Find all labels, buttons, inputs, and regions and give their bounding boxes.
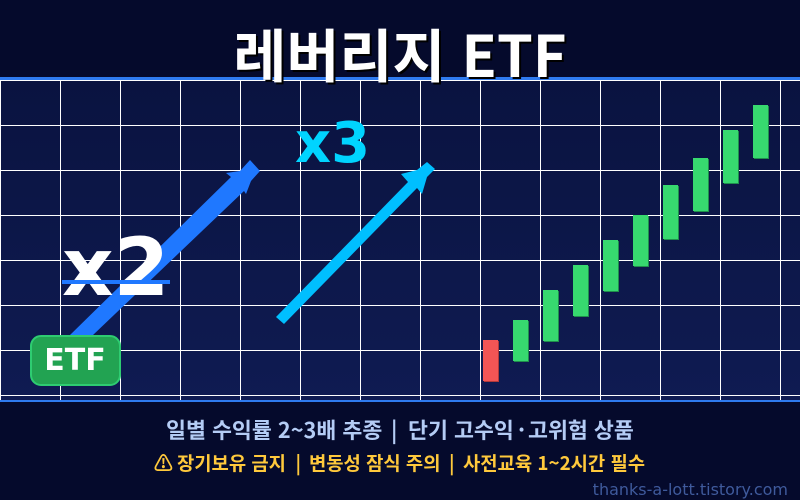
footer line 2: | bbox=[449, 449, 455, 476]
footer line 1: · bbox=[518, 414, 525, 445]
footer line 2 bbox=[154, 449, 645, 476]
candlestick chart bbox=[483, 105, 769, 382]
footer line 2: ⚠ bbox=[154, 449, 173, 476]
footer band bbox=[0, 400, 800, 500]
label: x3: x3 bbox=[295, 111, 370, 176]
candle: green 1 bbox=[513, 320, 529, 362]
candle: green 2 bbox=[543, 290, 559, 342]
candle: red bbox=[483, 340, 499, 382]
title: 레버리지 ETF bbox=[235, 12, 569, 96]
footer line 1: 단기 고수익 bbox=[408, 414, 514, 445]
candle: green 4 bbox=[603, 240, 619, 292]
candle: green 8 bbox=[723, 130, 739, 184]
badge: ETF: ETF bbox=[44, 343, 106, 378]
candle: green 9 bbox=[753, 105, 769, 159]
footer line 1: | bbox=[391, 414, 397, 445]
footer line 1: 일별 수익률 2~3배 추종 bbox=[166, 414, 382, 445]
title: 레버리지 ETF bbox=[233, 10, 567, 94]
candle: green 3 bbox=[573, 265, 589, 317]
header band bbox=[0, 0, 800, 77]
arrow: x2 blue bbox=[70, 160, 260, 335]
badge: ETF bbox=[31, 336, 120, 385]
candle: green 5 bbox=[633, 215, 649, 267]
chart background bbox=[0, 80, 800, 400]
footer line 1 bbox=[166, 414, 634, 445]
footer line 1: 고위험 상품 bbox=[528, 414, 634, 445]
candle: green 7 bbox=[693, 158, 709, 212]
footer line 2: 장기보유 금지 bbox=[177, 449, 286, 476]
watermark: thanks-a-lott.tistory.com bbox=[593, 480, 788, 499]
candle: green 6 bbox=[663, 185, 679, 240]
footer line 2: | bbox=[296, 449, 301, 476]
label: x2: x2 bbox=[62, 221, 169, 314]
footer line 2: 변동성 잠식 주의 bbox=[309, 449, 440, 476]
arrow: x3 cyan bbox=[276, 162, 435, 324]
footer line 2: 사전교육 1~2시간 필수 bbox=[463, 449, 645, 476]
